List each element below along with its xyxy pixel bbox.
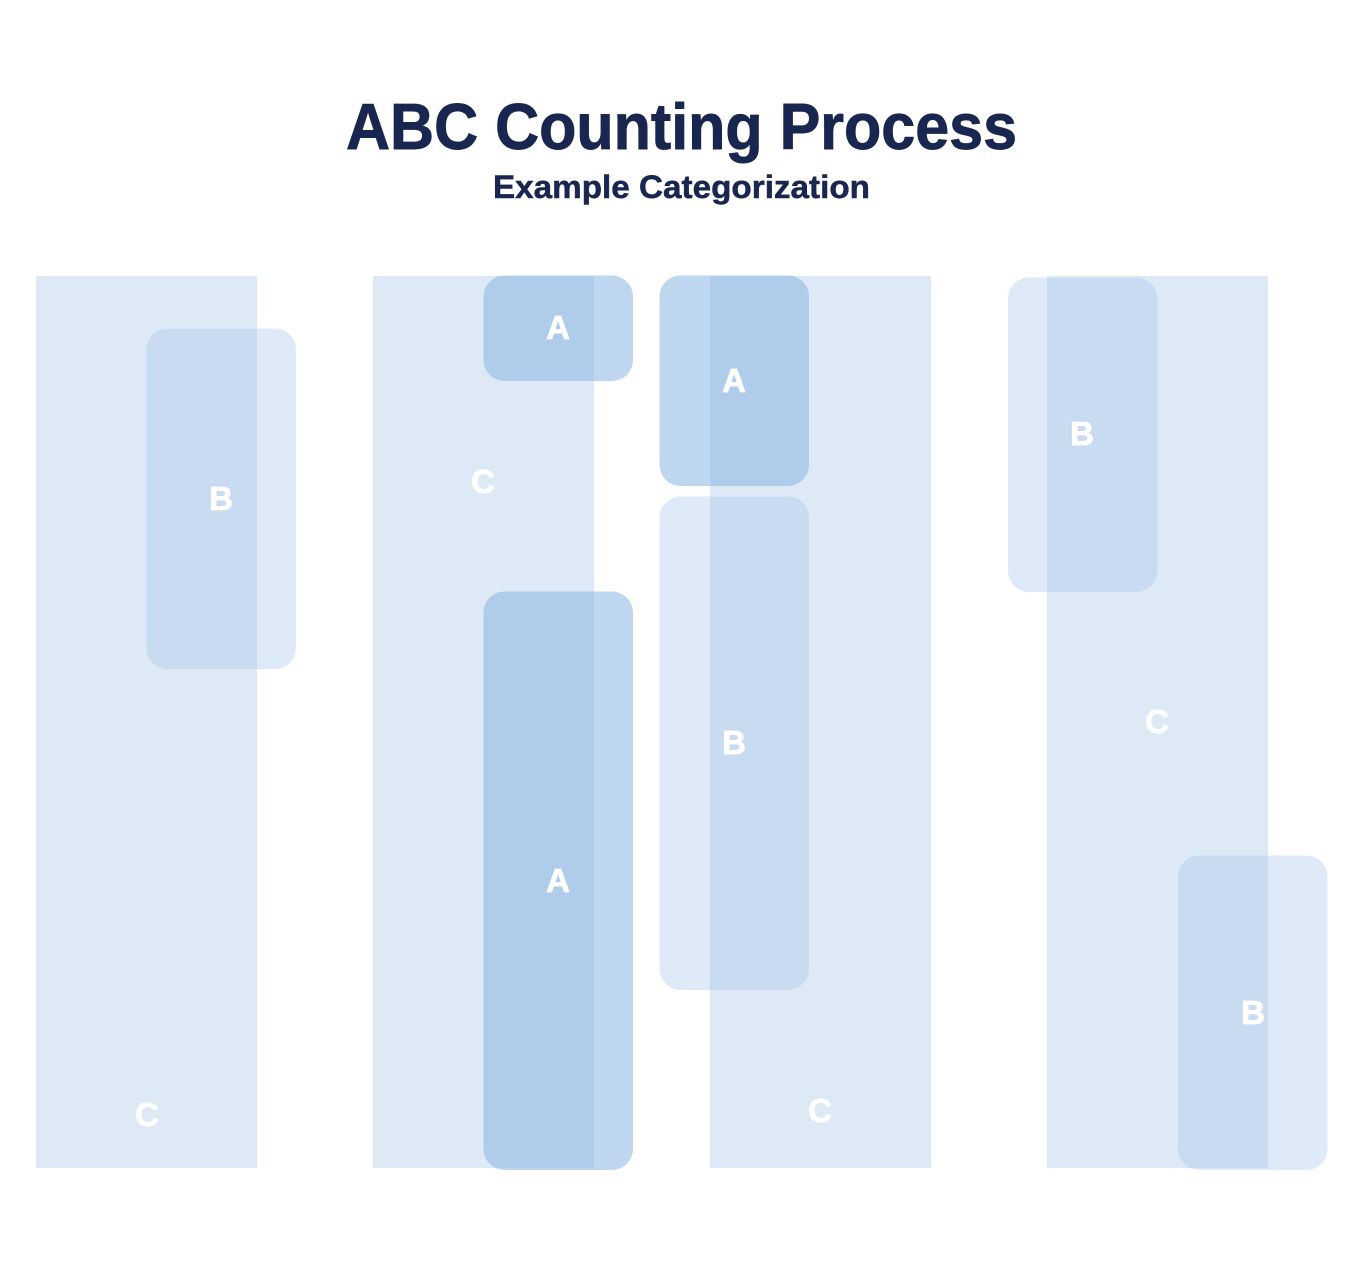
column 1 background [36, 276, 257, 1168]
block: B top [1008, 278, 1158, 592]
block: B [660, 496, 809, 990]
block: A [660, 276, 809, 486]
block: A bottom [484, 592, 633, 1170]
label: C: C [471, 463, 495, 500]
label: B: B [722, 724, 746, 761]
panel: column 3 [660, 276, 931, 1168]
block: B bottom [1178, 856, 1328, 1170]
panel: column 2 [373, 276, 633, 1170]
block: A top [484, 276, 633, 381]
title: ABC Counting Process [346, 90, 1017, 163]
label: A: A [722, 362, 746, 399]
label: C: C [808, 1092, 832, 1129]
panel: column 1 [36, 276, 296, 1168]
label: A bottom: A [546, 862, 570, 899]
label: C: C [135, 1096, 159, 1133]
block: B [146, 328, 296, 669]
label: B: B [209, 480, 233, 517]
subtitle: Example Categorization [493, 169, 870, 205]
panel: column 4 [1008, 276, 1328, 1170]
column 3 background [710, 276, 931, 1168]
label: C: C [1145, 703, 1169, 740]
label: B bottom: B [1241, 994, 1265, 1031]
label: B top: B [1070, 415, 1094, 452]
label: A top: A [546, 309, 570, 346]
column 4 background [1047, 276, 1268, 1168]
column 2 background [373, 276, 594, 1168]
